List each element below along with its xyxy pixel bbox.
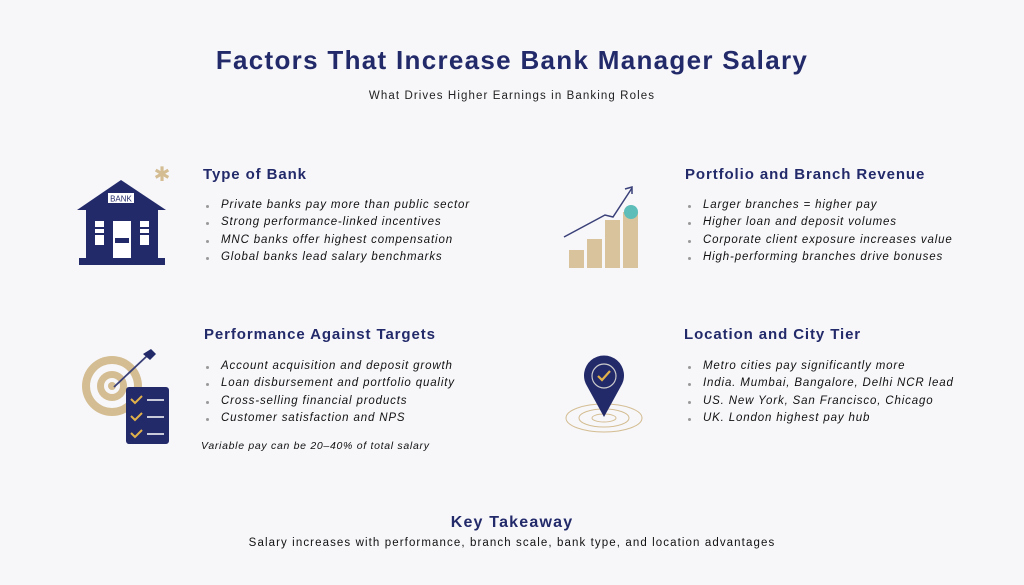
bullets: High-performing branches drive bonuses [703,251,943,263]
bullets: Corporate client exposure increases value [703,234,953,246]
panel: portfolio [564,166,953,268]
bullets [688,360,954,424]
bullets: Customer satisfaction and NPS [221,412,405,424]
icon: growth chart [564,186,638,268]
bullets: Larger branches = higher pay [703,199,877,211]
icon: location pin [566,356,642,432]
icon: bank [77,162,170,265]
bullets [206,360,455,424]
heading: Location and City Tier [684,326,861,343]
panel: location [566,326,954,432]
bullets: Strong performance-linked incentives [221,216,441,228]
bullets [688,199,953,263]
takeaway text: Salary increases with performance, branch scale, bank type, and location advantages [249,537,775,549]
bullets: Global banks lead salary benchmarks [221,251,443,263]
bullets: Higher loan and deposit volumes [703,216,897,228]
bullets: UK. London highest pay hub [703,412,870,424]
bullets: US. New York, San Francisco, Chicago [703,395,933,407]
subtitle: What Drives Higher Earnings in Banking Roles [369,90,655,102]
bullets [206,199,470,263]
bullets: Loan disbursement and portfolio quality [221,377,455,389]
title: Factors That Increase Bank Manager Salary [216,45,808,75]
panel: performance [82,326,455,452]
bullets: Private banks pay more than public sector [221,199,470,211]
bullets: Metro cities pay significantly more [703,360,905,372]
panel: type of bank [77,162,470,265]
note: Variable pay can be 20–40% of total salary [201,440,430,452]
icon: target and checklist [82,349,169,444]
heading: Portfolio and Branch Revenue [685,166,925,183]
bullets: India. Mumbai, Bangalore, Delhi NCR lead [703,377,954,389]
icon: bank: BANK [110,194,133,204]
bullets: MNC banks offer highest compensation [221,234,453,246]
takeaway heading: Key Takeaway [451,514,573,531]
heading: Performance Against Targets [204,326,436,343]
bullets: Cross-selling financial products [221,395,407,407]
heading: Type of Bank [203,166,307,183]
bullets: Account acquisition and deposit growth [221,360,453,372]
icon: bank: ✱ [154,162,170,186]
key takeaway [249,514,775,549]
